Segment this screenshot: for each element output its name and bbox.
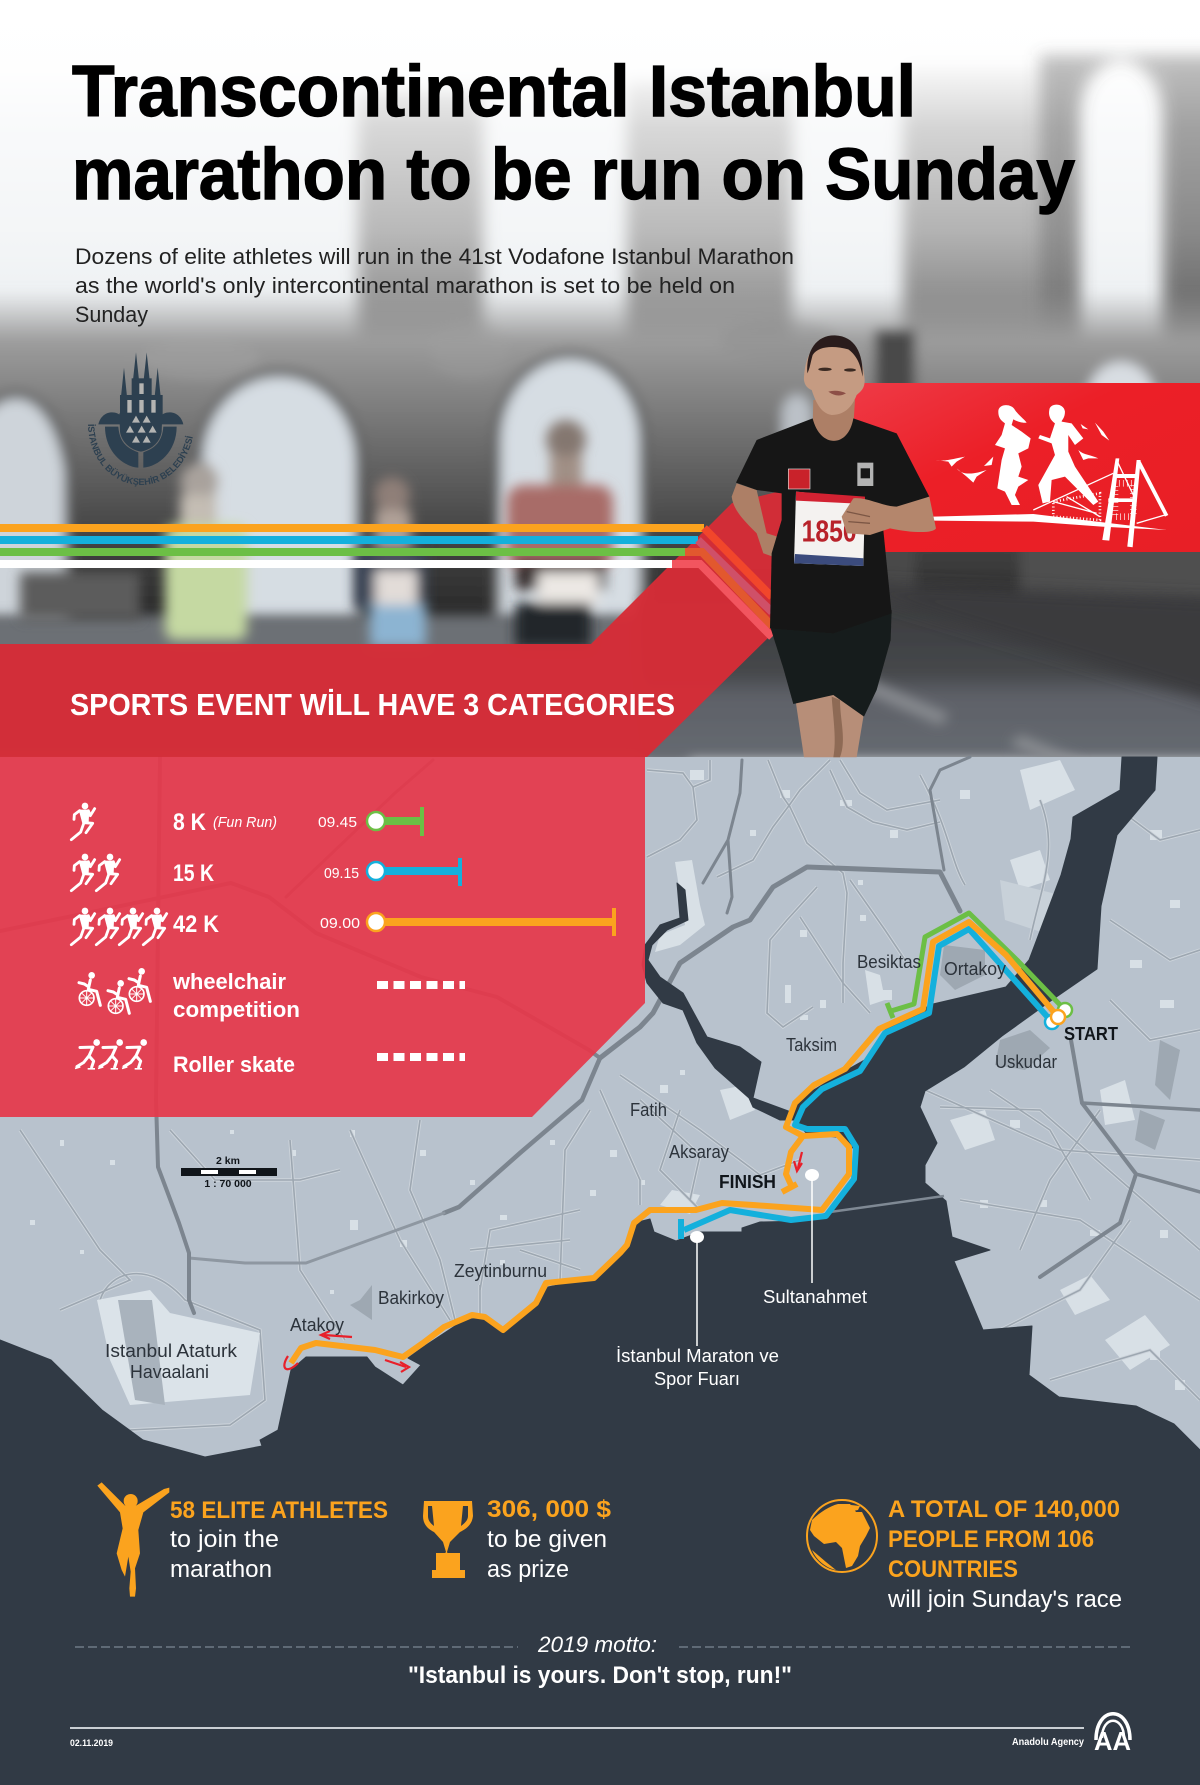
title: marathon to be run on Sunday xyxy=(72,135,1075,215)
map place labels: Aksaray xyxy=(669,1142,729,1162)
race bib: 1850 xyxy=(802,515,857,549)
hair xyxy=(807,335,863,377)
map: airport xyxy=(97,1290,260,1405)
motto xyxy=(75,1632,1133,1689)
intro text: as the world's only intercontinental marathon is set to be held on xyxy=(75,273,735,298)
title: Transcontinental Istanbul xyxy=(72,52,916,132)
race bib xyxy=(794,492,865,566)
row: wheelchair competition: wheelchair xyxy=(172,969,286,994)
coloured route stripes xyxy=(0,524,772,637)
footer xyxy=(70,1714,1131,1756)
stat: elite athletes: marathon xyxy=(170,1556,272,1583)
face details xyxy=(818,368,856,395)
row: 8 K fun run: 8 K xyxy=(173,809,207,836)
row: 42 K: 42 K xyxy=(173,911,220,938)
row: 8 K fun run: 09.45 xyxy=(318,814,357,831)
row: wheelchair competition: competition xyxy=(173,997,300,1022)
row: 8 K fun run xyxy=(71,803,424,840)
panel: red bridge and runners banner xyxy=(853,383,1200,552)
FINISH label: FINISH xyxy=(719,1172,776,1192)
map place labels: Bakirkoy xyxy=(378,1288,444,1308)
row: roller skate: Roller skate xyxy=(173,1052,295,1077)
stat: participants: will join Sunday's race xyxy=(887,1586,1122,1613)
map scale bar: 2 km xyxy=(216,1155,240,1167)
map marker: Sultanahmet xyxy=(763,1169,867,1307)
shirt badge left xyxy=(788,469,810,489)
row: wheelchair competition xyxy=(79,968,465,1022)
stat: prize money: 306, 000 $ xyxy=(487,1496,612,1523)
route: blue 15K xyxy=(681,929,1052,1239)
map: minor roads xyxy=(20,760,1200,1430)
panel: categories xyxy=(0,757,645,1117)
icon: Bosphorus bridge xyxy=(933,514,1167,530)
stat: prize money xyxy=(423,1496,612,1583)
row: 15 K xyxy=(71,854,462,891)
row: roller skate xyxy=(75,1039,465,1077)
stat: participants: PEOPLE FROM 106 xyxy=(888,1526,1094,1553)
icon: trophy xyxy=(423,1501,473,1578)
map: motorways xyxy=(0,757,1200,1313)
row: 15 K: 15 K xyxy=(173,860,215,887)
route start markers xyxy=(1045,1003,1072,1029)
map place labels: Istanbul Ataturk xyxy=(105,1341,238,1361)
map place labels: Zeytinburnu xyxy=(454,1261,547,1281)
map scale bar xyxy=(181,1155,277,1190)
footer: 02.11.2019 xyxy=(70,1738,113,1748)
map place labels: Fatih xyxy=(630,1100,667,1120)
footer: Anadolu Agency xyxy=(1012,1737,1084,1748)
map: darker districts xyxy=(350,945,1180,1320)
START label: START xyxy=(1064,1024,1118,1044)
map place labels: Atakoy xyxy=(290,1315,344,1335)
route: orange 42K xyxy=(291,922,1058,1363)
icon: seagulls xyxy=(935,423,1109,483)
map scale bar: 1 : 70 000 xyxy=(204,1178,252,1190)
map place labels: Taksim xyxy=(786,1035,837,1055)
stat: elite athletes: 58 ELITE ATHLETES xyxy=(170,1497,388,1524)
shirt logo right xyxy=(857,463,873,486)
map: Marmaray bridge line xyxy=(830,1196,944,1212)
map place labels xyxy=(105,952,1057,1382)
map place labels: Ortakoy xyxy=(944,959,1006,979)
map marker: Istanbul Maraton ve Spor Fuari xyxy=(616,1231,779,1389)
motto: 2019 motto: xyxy=(537,1632,657,1657)
shorts xyxy=(771,610,892,717)
shirt xyxy=(736,418,929,633)
head xyxy=(804,340,865,415)
icon: Istanbul municipality logo xyxy=(88,352,193,486)
map: sea, Bosphorus and Golden Horn xyxy=(0,757,1200,1785)
map place labels: Besiktas xyxy=(857,952,921,972)
stat: elite athletes xyxy=(97,1482,388,1597)
icon: man runner xyxy=(1038,405,1098,505)
map: light urban patches and speckles xyxy=(30,760,1185,1390)
icon: woman runner xyxy=(995,405,1031,505)
map place labels: Havaalani xyxy=(130,1362,209,1382)
stat: participants: A TOTAL OF 140,000 xyxy=(888,1496,1120,1523)
row: 8 K fun run: (Fun Run) xyxy=(213,815,277,831)
stat: elite athletes: to join the xyxy=(170,1526,279,1553)
map marker: Istanbul Maraton ve Spor Fuari: Spor Fuarı xyxy=(654,1369,740,1389)
map place labels: Uskudar xyxy=(995,1052,1057,1072)
red diagonal banner xyxy=(0,490,785,757)
right arm and hand xyxy=(842,497,936,535)
icon: Anadolu Agency logo: AA xyxy=(1094,1726,1131,1756)
stat: prize money: to be given xyxy=(487,1526,607,1553)
stat: prize money: as prize xyxy=(487,1556,569,1583)
background photo: aqueduct and blurred runners xyxy=(0,0,1200,770)
main runner photo xyxy=(732,335,936,757)
heading: categories: SPORTS EVENT WİLL HAVE 3 CATEGORIES xyxy=(70,687,675,722)
red direction arrows xyxy=(284,1152,802,1372)
route: green 8K xyxy=(887,913,1065,1018)
icon: globe xyxy=(807,1500,877,1572)
icon: victorious runner xyxy=(97,1482,169,1597)
intro text xyxy=(75,244,794,327)
left arm xyxy=(732,483,793,559)
stat: participants: COUNTRIES xyxy=(888,1556,1018,1583)
row: 15 K: 09.15 xyxy=(324,865,359,882)
row: 42 K: 09.00 xyxy=(320,915,360,932)
neck xyxy=(813,400,855,442)
stat: participants xyxy=(807,1496,1122,1613)
intro text: Dozens of elite athletes will run in the 41st Vodafone Istanbul Marathon xyxy=(75,244,794,269)
map marker: Istanbul Maraton ve Spor Fuari: İstanbul Maraton ve xyxy=(616,1346,779,1366)
map marker: Sultanahmet: Sultanahmet xyxy=(763,1287,867,1307)
intro text: Sunday xyxy=(75,302,148,327)
title xyxy=(72,52,1075,215)
row: 42 K xyxy=(71,908,616,945)
icon: Istanbul municipality logo: İSTANBUL BÜYÜKŞEHİR BELEDİYESİ xyxy=(88,424,193,486)
legs xyxy=(795,690,864,757)
map: land background xyxy=(0,757,1200,1785)
motto: "Istanbul is yours. Don't stop, run!" xyxy=(408,1662,792,1689)
